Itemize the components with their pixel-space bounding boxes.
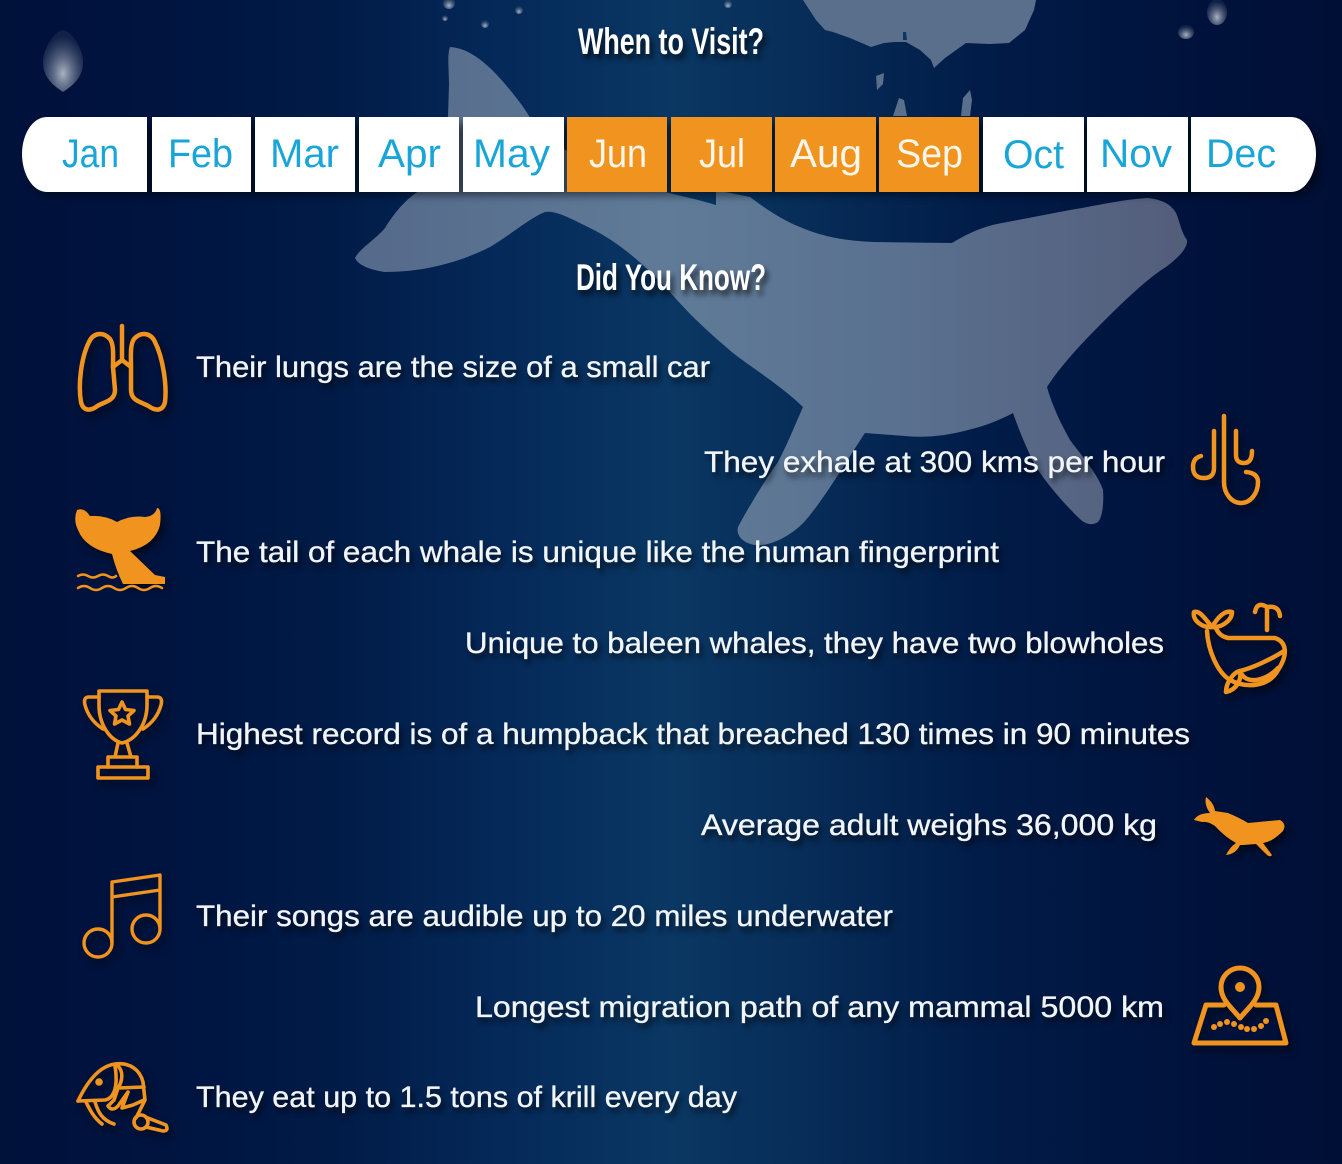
month labels: Aug xyxy=(790,132,862,176)
month labels: Apr xyxy=(378,132,441,176)
fact: lungs: Their lungs are the size of a small car xyxy=(196,351,710,384)
icon: music note xyxy=(84,875,160,957)
month labels: Feb xyxy=(168,132,233,176)
month labels: Jul xyxy=(699,132,745,176)
icon: whale spouting xyxy=(1194,605,1285,692)
month: Sep xyxy=(879,117,979,192)
fact: migration: Longest migration path of any mammal 5000 km xyxy=(475,991,1164,1024)
month labels: Jun xyxy=(589,132,647,176)
month: Jan xyxy=(22,117,147,192)
month: Apr xyxy=(359,117,459,192)
fact: tail: The tail of each whale is unique like the human fingerprint xyxy=(196,536,1000,569)
month labels: Mar xyxy=(270,132,339,176)
month bar shadow xyxy=(28,124,1320,196)
pin centre and route xyxy=(1211,982,1269,1032)
tail fluke xyxy=(75,508,165,584)
month: Dec xyxy=(1191,117,1316,192)
month labels: Jan xyxy=(62,132,119,176)
month labels: Dec xyxy=(1206,132,1276,176)
month: Jul xyxy=(671,117,772,192)
icon: krill xyxy=(78,1064,167,1131)
month: May xyxy=(463,117,564,192)
heading: when to visit: When to Visit? xyxy=(578,21,764,62)
month: Nov xyxy=(1087,117,1188,192)
waves xyxy=(78,574,162,590)
month labels xyxy=(62,132,1276,177)
month labels: Sep xyxy=(896,132,963,176)
fact: krill: They eat up to 1.5 tons of krill every day xyxy=(196,1081,737,1114)
icon: trophy xyxy=(84,691,162,778)
heading: did you know: Did You Know? xyxy=(576,257,766,298)
month: Jun xyxy=(567,117,667,192)
fact: weight: Average adult weighs 36,000 kg xyxy=(701,809,1157,842)
month labels: May xyxy=(473,132,550,176)
whale silhouette xyxy=(355,47,1187,545)
fact: breach record: Highest record is of a humpback that breached 130 times in 90 minutes xyxy=(196,718,1190,751)
month: Oct xyxy=(983,117,1084,192)
fact: exhale: They exhale at 300 kms per hour xyxy=(704,446,1165,479)
month labels: Oct xyxy=(1003,133,1064,177)
fact: songs: Their songs are audible up to 20 miles underwater xyxy=(196,900,893,933)
month: Feb xyxy=(152,117,251,192)
map: australia xyxy=(803,0,1036,116)
icon: whale silhouette xyxy=(1194,797,1284,856)
month: Mar xyxy=(255,117,355,192)
icon: lungs xyxy=(80,326,166,410)
icon: exhale xyxy=(1193,416,1258,503)
icon: whale tail xyxy=(75,508,165,590)
map pin xyxy=(1194,968,1286,1043)
icon: map pin xyxy=(1194,968,1286,1043)
water drops xyxy=(43,0,1227,92)
month: Aug xyxy=(775,117,876,192)
month labels: Nov xyxy=(1100,132,1172,176)
fact: blowholes: Unique to baleen whales, they have two blowholes xyxy=(465,627,1164,660)
month bar xyxy=(22,117,1320,196)
